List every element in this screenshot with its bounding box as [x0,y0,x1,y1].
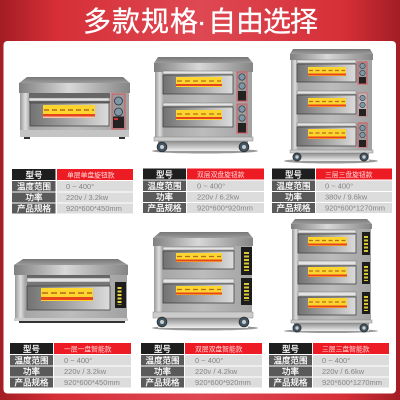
spec table: triple deck smart model: 型号 [282,344,299,354]
spec table: double deck smart model: 0 ~ 400° [195,356,223,365]
spec table: single deck smart model: 型号 [23,344,40,354]
spec table: double deck knob model: 双层双盘旋钮款 [197,170,245,179]
spec table: single deck knob model: 0 ~ 400° [66,182,94,191]
spec table: single deck smart model: 温度范围 [14,356,49,366]
oven: double deck knob model [152,57,258,154]
spec table: triple deck knob model: 产品规格 [276,203,311,213]
spec table: single deck smart model: 功率 [23,366,40,376]
spec table: triple deck smart model: 0 ~ 400° [322,356,350,365]
oven: triple deck smart model [284,219,378,333]
spec table: double deck smart model [141,343,262,388]
spec table: double deck knob model: 型号 [156,170,173,180]
spec table: double deck knob model: 功率 [156,192,173,202]
spec table: single deck smart model: 920*600*450mm [64,378,120,387]
spec table: single deck knob model: 220v / 3.2kw [66,193,109,202]
spec table: single deck smart model [10,343,131,388]
spec table: triple deck smart model: 220v / 6.6kw [322,367,365,376]
spec table: single deck knob model: 产品规格 [17,204,51,214]
spec table: triple deck smart model [269,343,389,388]
spec table: single deck knob model: 温度范围 [17,182,51,192]
spec table: double deck smart model: 产品规格 [145,378,180,388]
spec table: single deck knob model: 单层单盘旋钮款 [67,170,115,180]
spec table: triple deck knob model: 0 ~ 400° [325,182,353,190]
oven: single deck knob model [19,77,130,139]
spec table: triple deck smart model: 功率 [282,366,299,376]
spec table: double deck knob model: 920*600*920mm [197,204,253,212]
spec table: double deck knob model: 220v / 6.2kw [197,192,240,202]
spec table: single deck knob model: 920*600*450mm [66,204,122,213]
spec table: single deck knob model: 功率 [25,192,43,202]
spec table: single deck smart model: 一层一盘智能款 [64,344,112,354]
spec table: double deck smart model: 双层双盘智能款 [195,344,243,354]
spec table: triple deck knob model: 温度范围 [276,181,311,191]
spec table: double deck knob model: 产品规格 [147,203,182,213]
spec table: triple deck knob model: 型号 [285,170,302,180]
spec table: triple deck knob model: 920*600*1270mm [325,204,385,212]
spec table: triple deck knob model: 三层三盘旋钮款 [325,170,373,179]
spec table: triple deck knob model: 380v / 9.6kw [325,192,368,202]
spec table: triple deck smart model: 温度范围 [273,356,308,366]
spec table: double deck knob model [143,168,264,213]
spec table: triple deck smart model: 产品规格 [273,378,308,388]
spec table: double deck knob model: 0 ~ 400° [197,182,225,190]
spec table: double deck smart model: 温度范围 [145,356,180,366]
spec table: single deck knob model [12,169,133,214]
spec table: double deck smart model: 220v / 4.2kw [195,367,238,376]
spec table: triple deck knob model [272,168,392,213]
spec table: triple deck knob model: 功率 [285,192,302,202]
spec table: double deck smart model: 920*600*920mm [195,378,251,387]
spec table: double deck knob model: 温度范围 [147,181,182,191]
oven: single deck smart model [14,259,128,323]
oven: triple deck knob model [284,49,378,164]
spec table: triple deck smart model: 三层三盘智能款 [322,344,370,354]
spec table: single deck smart model: 产品规格 [14,378,49,388]
spec table: single deck smart model: 220v / 3.2kw [64,367,107,376]
spec table: double deck smart model: 型号 [154,344,171,354]
spec table: triple deck smart model: 920*600*1270mm [322,378,382,387]
spec table: double deck smart model: 功率 [154,366,171,376]
spec table: single deck knob model: 型号 [25,170,43,180]
oven: double deck smart model [152,232,258,330]
spec table: single deck smart model: 0 ~ 400° [64,356,92,365]
title: 多款规格·自由选择 [83,6,318,37]
